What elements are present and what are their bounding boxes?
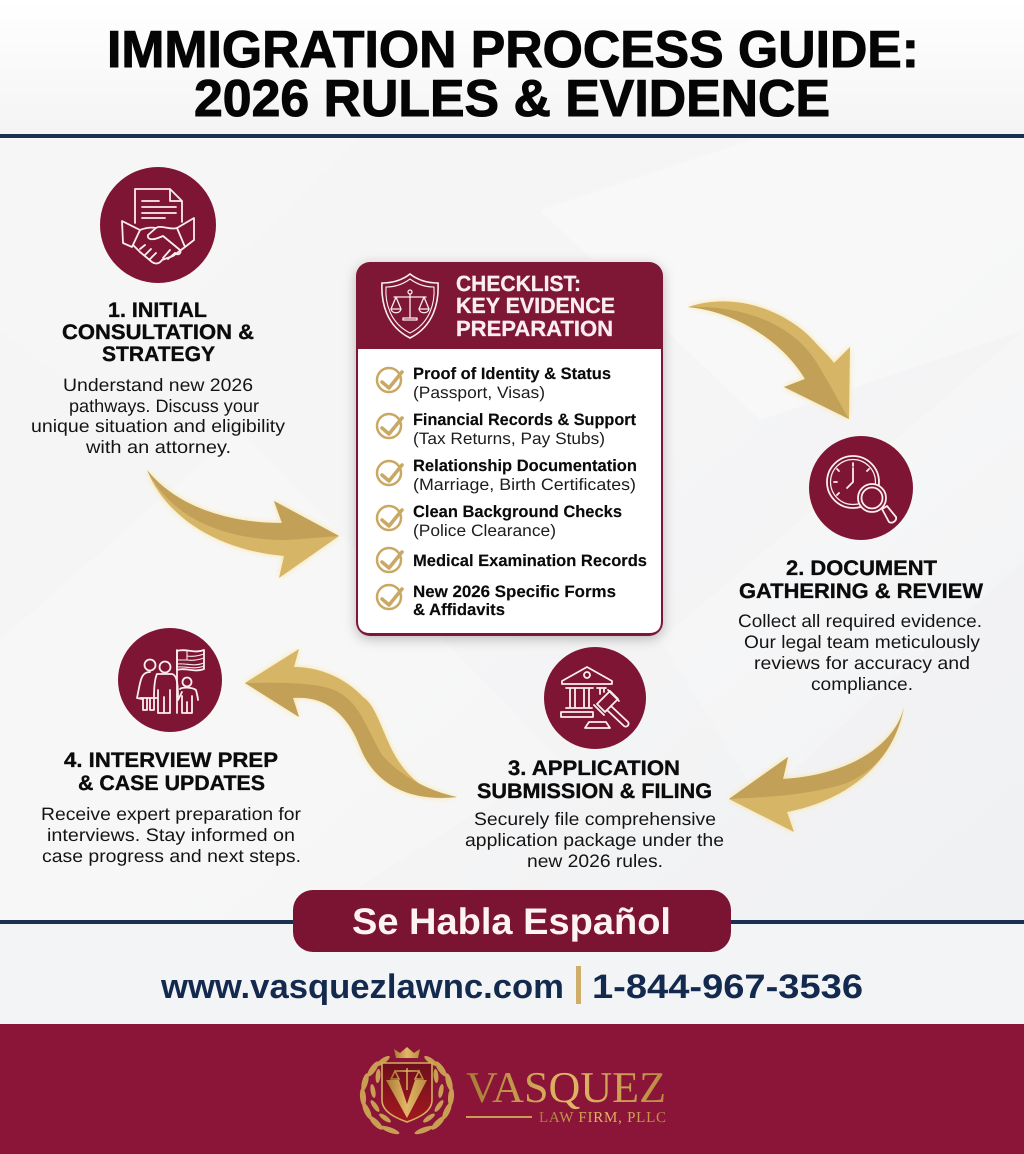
checklist item: background bbox=[377, 503, 622, 540]
text: step 1 description: with an attorney. bbox=[85, 437, 231, 457]
icon: courthouse and gavel bbox=[544, 647, 646, 749]
text: step 2 description: Collect all required evidence. bbox=[738, 611, 982, 631]
heading: step 1: 1. INITIAL bbox=[108, 299, 207, 322]
step 3: application submission and filing bbox=[465, 647, 724, 871]
text: step 2 description: compliance. bbox=[811, 674, 913, 694]
heading: step 2: GATHERING & REVIEW bbox=[739, 580, 983, 603]
heading: step 1: STRATEGY bbox=[102, 343, 215, 366]
icon: shield with scales bbox=[382, 274, 438, 338]
text: step 2 description: Our legal team meticulously bbox=[744, 632, 980, 652]
heading: checklist: KEY EVIDENCE bbox=[456, 293, 615, 318]
wordmark: VASQUEZ bbox=[466, 1063, 666, 1112]
emblem bbox=[359, 1047, 455, 1136]
text: step 3 description: application package under the bbox=[465, 830, 724, 850]
text: step 3 description: Securely file comprehensive bbox=[474, 809, 716, 829]
heading: checklist bbox=[456, 271, 615, 341]
wordmark: LAW FIRM, PLLC bbox=[539, 1110, 666, 1126]
banner: se habla espanol bbox=[293, 890, 731, 952]
arrow: step 1 to checklist bbox=[147, 470, 339, 578]
step 1: initial consultation and strategy bbox=[31, 167, 285, 457]
text: step 4 description bbox=[41, 804, 301, 866]
text: step 3 description bbox=[465, 809, 724, 871]
panel: evidence checklist bbox=[356, 262, 663, 636]
text: step 4 description: case progress and next steps. bbox=[42, 846, 301, 866]
text: step 1 description: Understand new 2026 bbox=[63, 375, 253, 395]
text: step 4 description: Receive expert preparation for bbox=[41, 804, 301, 824]
title: 2026 RULES & EVIDENCE bbox=[194, 70, 830, 128]
checklist item: relationship: (Marriage, Birth Certificates) bbox=[413, 476, 636, 494]
banner: se habla espanol: Se Habla Español bbox=[352, 901, 671, 942]
checklist item: identity bbox=[377, 365, 611, 402]
heading: checklist: CHECKLIST: bbox=[456, 271, 581, 296]
checklist item: forms: & Affidavits bbox=[413, 601, 505, 619]
icon: family with flag bbox=[118, 628, 222, 732]
checklist item: relationship: Relationship Documentation bbox=[413, 457, 637, 475]
checklist item: financial: (Tax Returns, Pay Stubs) bbox=[413, 430, 605, 448]
checklist item: medical: Medical Examination Records bbox=[413, 552, 647, 570]
step 4: interview prep and case updates bbox=[41, 628, 301, 866]
header background bbox=[0, 0, 1024, 135]
heading: step 2 bbox=[739, 557, 983, 603]
heading: step 3: 3. APPLICATION bbox=[508, 757, 680, 780]
text: step 3 description: new 2026 rules. bbox=[527, 851, 663, 871]
text: step 4 description: interviews. Stay informed on bbox=[47, 825, 295, 845]
arrow: step 2 to step 3 bbox=[729, 707, 904, 832]
title: IMMIGRATION PROCESS GUIDE: bbox=[107, 21, 919, 79]
step 2: document gathering and review bbox=[738, 436, 983, 694]
text: step 2 description bbox=[738, 611, 982, 694]
checklist item: background: Clean Background Checks bbox=[413, 503, 622, 521]
text: step 1 description: pathways. Discuss your bbox=[69, 396, 259, 416]
heading: step 2: 2. DOCUMENT bbox=[786, 557, 937, 580]
heading: step 3: SUBMISSION & FILING bbox=[477, 780, 712, 803]
text: step 1 description bbox=[31, 375, 285, 457]
checklist item: identity: (Passport, Visas) bbox=[413, 384, 545, 402]
checklist item: forms bbox=[377, 583, 616, 619]
icon: clock and magnifying glass bbox=[809, 436, 913, 540]
heading: step 4: 4. INTERVIEW PREP bbox=[64, 749, 278, 772]
checklist item: medical bbox=[377, 548, 647, 572]
icon: document and handshake bbox=[100, 167, 216, 283]
checklist item: financial bbox=[377, 411, 636, 448]
checklist item: financial: Financial Records & Support bbox=[413, 411, 636, 429]
contact details: 1-844-967-3536 bbox=[592, 968, 863, 1006]
text: step 1 description: unique situation and eligibility bbox=[31, 416, 285, 436]
checklist item: background: (Police Clearance) bbox=[413, 522, 556, 540]
heading: step 3 bbox=[477, 757, 712, 803]
heading: step 1: CONSULTATION & bbox=[62, 321, 254, 344]
checklist item: identity: Proof of Identity & Status bbox=[413, 365, 611, 383]
footer band bbox=[0, 1024, 1024, 1154]
heading: step 1 bbox=[62, 299, 254, 366]
contact details: www.vasquezlawnc.com bbox=[160, 968, 564, 1006]
title bbox=[107, 21, 919, 128]
arrow: checklist to step 2 bbox=[688, 301, 850, 419]
arrow: step 3 to step 4 bbox=[245, 649, 457, 798]
contact details bbox=[160, 966, 863, 1006]
heading: checklist: PREPARATION bbox=[456, 316, 613, 341]
text: step 2 description: reviews for accuracy and bbox=[754, 653, 970, 673]
heading: step 4: & CASE UPDATES bbox=[78, 772, 265, 795]
heading: step 4 bbox=[64, 749, 278, 795]
logo: vasquez law firm bbox=[359, 1047, 666, 1136]
checklist item: forms: New 2026 Specific Forms bbox=[413, 583, 616, 601]
checklist item: relationship bbox=[377, 457, 637, 494]
body background bbox=[0, 135, 1024, 1025]
